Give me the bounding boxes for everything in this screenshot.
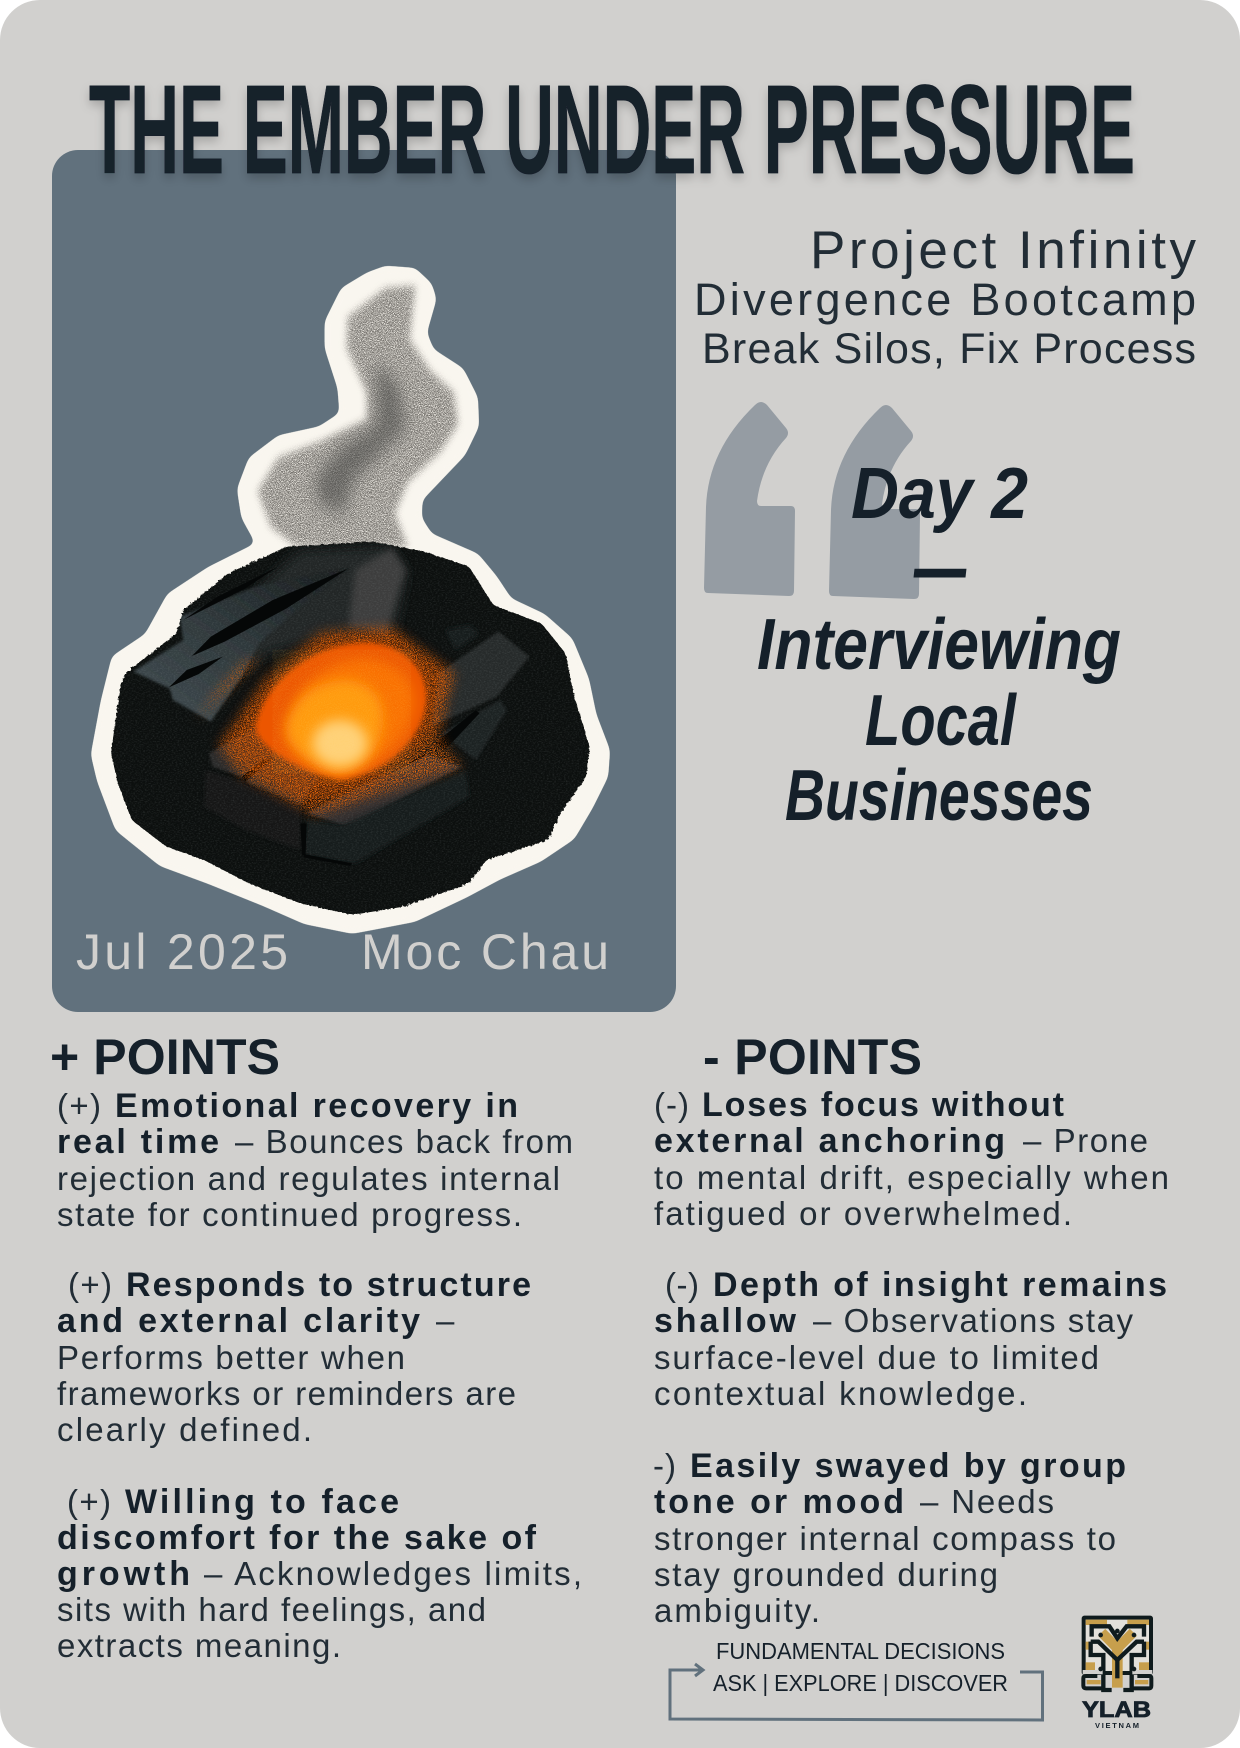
- point 3: stay grounded during: [654, 1556, 998, 1593]
- ember sparks: [197, 627, 462, 817]
- point 2: Depth of insight remains: [713, 1266, 1167, 1304]
- point 1: – Prone: [1023, 1122, 1148, 1159]
- footer: decision cycle: [670, 1638, 1042, 1720]
- point 3: growth: [57, 1555, 190, 1593]
- arrow: loop: [670, 1664, 1042, 1720]
- ember core: [286, 680, 383, 773]
- point 2: and external clarity: [57, 1302, 420, 1340]
- point 1: state for continued progress.: [57, 1196, 522, 1233]
- point 1: – Bounces back from: [235, 1123, 573, 1160]
- point 1: [654, 1086, 1169, 1232]
- point 3: stronger internal compass to: [654, 1520, 1116, 1557]
- point 3: [57, 1483, 582, 1664]
- ember texture: [273, 650, 411, 773]
- dash: —: [913, 517, 967, 616]
- point 2: [654, 1266, 1167, 1412]
- location label: Moc Chau: [361, 924, 609, 980]
- point 1: [57, 1087, 573, 1233]
- point 1: fatigued or overwhelmed.: [654, 1195, 1072, 1232]
- point 2: shallow: [654, 1302, 797, 1340]
- point 2: Responds to structure: [126, 1266, 531, 1304]
- point 3: sits with hard feelings, and: [57, 1591, 486, 1628]
- date label: Jul 2025: [76, 924, 288, 980]
- point 3: ambiguity.: [654, 1592, 820, 1629]
- point 3: – Acknowledges limits,: [204, 1555, 582, 1592]
- logo mark: [1083, 1618, 1152, 1690]
- footer line 1: FUNDAMENTAL DECISIONS: [716, 1638, 1005, 1664]
- session line 2: Local: [865, 681, 1018, 761]
- day label: Day 2: [851, 454, 1028, 534]
- panel: positive points: [50, 1029, 582, 1664]
- point 3: -): [653, 1447, 676, 1484]
- logo wordmark: YLAB: [1082, 1697, 1151, 1722]
- bootcamp name: Divergence Bootcamp: [694, 274, 1196, 325]
- point 3: [653, 1447, 1126, 1629]
- point 1: (+): [57, 1087, 101, 1124]
- session line 1: Interviewing: [757, 605, 1121, 685]
- session heading: [757, 454, 1121, 836]
- coal body: [111, 542, 590, 915]
- heading: + points: + POINTS: [50, 1029, 280, 1085]
- point 1: to mental drift, especially when: [654, 1159, 1169, 1196]
- point 2: contextual knowledge.: [654, 1375, 1027, 1412]
- point 2: [57, 1266, 531, 1448]
- sticker outline and smoke: [91, 266, 610, 934]
- heading: - points: - POINTS: [703, 1029, 922, 1085]
- point 3: extracts meaning.: [57, 1627, 341, 1664]
- ember hot spot: [312, 720, 368, 767]
- point 3: discomfort for the sake of: [57, 1519, 537, 1557]
- coal surfaces: [108, 540, 593, 917]
- point 1: Emotional recovery in: [115, 1087, 518, 1125]
- point 1: Loses focus without: [702, 1086, 1064, 1124]
- coal texture: [108, 540, 593, 917]
- panel: illustration card: [52, 150, 676, 1012]
- point 1: rejection and regulates internal: [57, 1160, 560, 1197]
- point 2: (+): [68, 1266, 112, 1303]
- subtitle block: [694, 221, 1196, 373]
- point 2: frameworks or reminders are: [57, 1375, 516, 1412]
- ember haze: [225, 630, 448, 803]
- point 3: Willing to face: [125, 1483, 399, 1521]
- point 2: Performs better when: [57, 1339, 405, 1376]
- point 2: clearly defined.: [57, 1411, 312, 1448]
- project name: Project Infinity: [810, 221, 1196, 280]
- panel: negative points: [653, 1029, 1169, 1629]
- point 3: tone or mood: [654, 1483, 904, 1521]
- icon: quotation marks: [704, 402, 920, 599]
- point 2: (-): [665, 1266, 699, 1303]
- logo subtext: VIETNAM: [1095, 1721, 1139, 1730]
- point 3: (+): [67, 1483, 111, 1520]
- coal: [108, 540, 593, 917]
- ember mid: [288, 658, 415, 773]
- point 2: – Observations stay: [813, 1302, 1134, 1339]
- coal cracks: [169, 567, 479, 866]
- footer line 2: ASK | EXPLORE | DISCOVER: [713, 1670, 1008, 1696]
- point 2: –: [436, 1302, 455, 1339]
- session line 3: Businesses: [785, 756, 1093, 836]
- point 1: real time: [57, 1123, 219, 1161]
- logo: YLAB Vietnam: [1082, 1618, 1152, 1730]
- point 1: (-): [654, 1086, 689, 1123]
- point 1: external anchoring: [654, 1122, 1005, 1160]
- point 3: – Needs: [920, 1483, 1054, 1520]
- ember glow: [256, 643, 426, 780]
- point 3: Easily swayed by group: [690, 1447, 1126, 1485]
- point 2: surface-level due to limited: [654, 1339, 1099, 1376]
- illustration: smoking ember sticker: [91, 266, 610, 934]
- tagline: Break Silos, Fix Process: [702, 325, 1196, 373]
